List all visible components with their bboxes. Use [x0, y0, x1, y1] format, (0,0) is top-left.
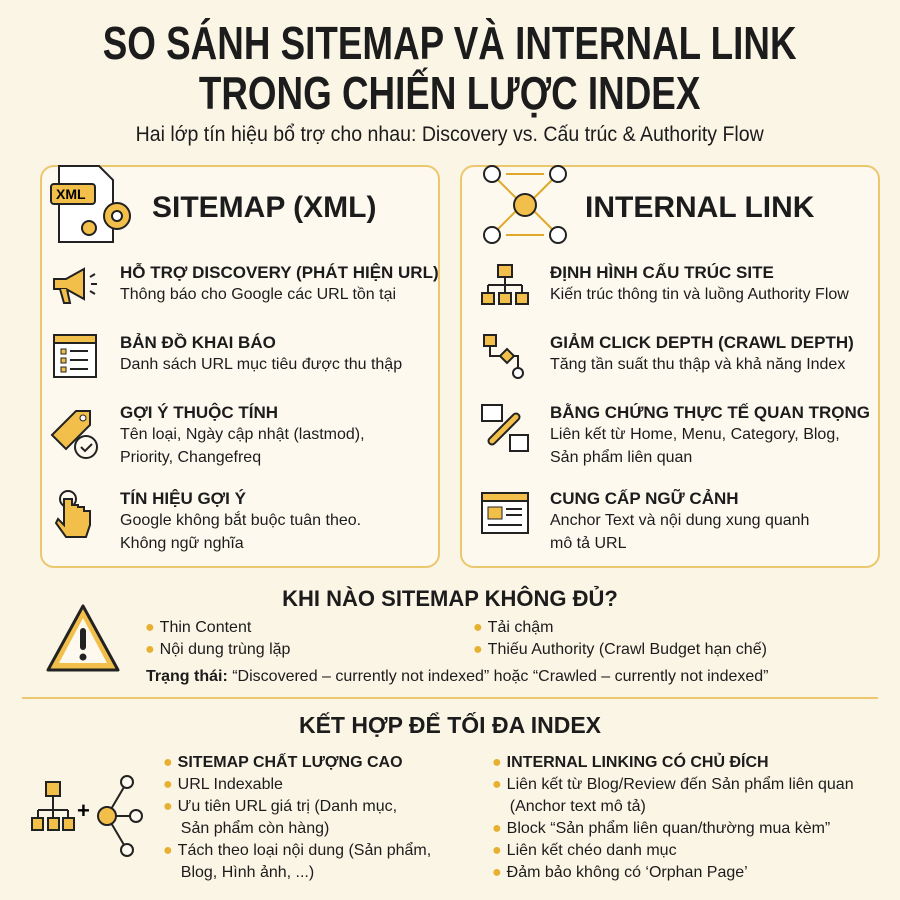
panel: internal link: BẰNG CHỨNG THỰC TẾ QUAN TRỌNG: [550, 403, 870, 422]
bullets: ● Thin Content: [145, 619, 251, 636]
icon: combine: +: [77, 798, 90, 823]
list: internal linking: ● INTERNAL LINKING CÓ CHỦ ĐÍCH: [492, 754, 769, 771]
list: internal linking: [492, 752, 854, 881]
panel: sitemap: Thông báo cho Google các URL tồn tại: [120, 286, 396, 303]
title: SO SÁNH SITEMAP VÀ INTERNAL LINK: [103, 17, 797, 69]
heading: KHI NÀO SITEMAP KHÔNG ĐỦ?: [282, 586, 618, 611]
panel: sitemap: Priority, Changefreq: [120, 449, 261, 466]
panel: sitemap: Tên loại, Ngày cập nhật (lastmod),: [120, 426, 365, 443]
panel: internal link: Anchor Text và nội dung xung quanh: [550, 512, 809, 529]
title: TRONG CHIẾN LƯỢC INDEX: [199, 67, 701, 119]
list: internal linking: ● Liên kết từ Blog/Review đến Sản phẩm liên quan: [492, 776, 854, 793]
list: internal linking: (Anchor text mô tả): [510, 798, 646, 815]
panel: internal link: Liên kết từ Home, Menu, Category, Blog,: [550, 426, 840, 443]
list: internal linking: ● Block “Sản phẩm liên quan/thường mua kèm”: [492, 820, 830, 837]
heading: SITEMAP (XML): [152, 191, 376, 224]
item: ban do: [53, 333, 402, 378]
list: sitemap chat luong cao: ● URL Indexable: [163, 776, 283, 793]
heading: KẾT HỢP ĐỂ TỐI ĐA INDEX: [299, 712, 601, 738]
panel: sitemap: TÍN HIỆU GỢI Ý: [120, 489, 246, 508]
panel: internal link: CUNG CẤP NGỮ CẢNH: [550, 489, 739, 508]
list: sitemap chat luong cao: Blog, Hình ảnh, ...): [181, 864, 314, 881]
list: sitemap chat luong cao: ● Tách theo loại nội dung (Sản phẩm,: [163, 842, 431, 859]
panel: sitemap: Google không bắt buộc tuân theo.: [120, 512, 361, 529]
item: cau truc: [481, 263, 849, 305]
panel: internal link: Tăng tần suất thu thập và khả năng Index: [550, 356, 845, 373]
list: sitemap chat luong cao: ● SITEMAP CHẤT LƯỢNG CAO: [163, 754, 403, 771]
panel: internal link: [460, 165, 880, 568]
section: khi nao sitemap khong du: ● Thiếu Authority (Crawl Budget hạn chế): [473, 641, 767, 658]
panel: sitemap: Không ngữ nghĩa: [120, 535, 244, 552]
panel: sitemap: HỖ TRỢ DISCOVERY (PHÁT HIỆN URL): [120, 263, 439, 282]
section: khi nao sitemap khong du: [46, 586, 768, 685]
item: bang chung: [481, 403, 870, 466]
item: tin hieu goi y: [54, 489, 361, 552]
item: discovery: [53, 263, 439, 304]
list: internal linking: ● Liên kết chéo danh mục: [492, 842, 677, 859]
list: sitemap chat luong cao: [163, 753, 431, 881]
section: khi nao sitemap khong du: ● Tải chậm: [473, 619, 553, 636]
panel: internal link: mô tả URL: [550, 535, 626, 552]
bullets: ● Nội dung trùng lặp: [145, 641, 290, 658]
list: sitemap chat luong cao: Sản phẩm còn hàng): [181, 820, 329, 837]
item: goi y thuoc tinh: [50, 402, 365, 466]
title: [103, 17, 797, 119]
item: click depth: [483, 333, 854, 379]
list: internal linking: ● Đảm bảo không có ‘Orphan Page’: [492, 864, 748, 881]
panel: sitemap: BẢN ĐỒ KHAI BÁO: [120, 333, 276, 352]
panel: sitemap: [40, 165, 440, 568]
panel: sitemap: Danh sách URL mục tiêu được thu thập: [120, 356, 402, 373]
icon: warning: [46, 604, 120, 672]
section: ket hop: [31, 712, 854, 881]
list: sitemap chat luong cao: ● Ưu tiên URL giá trị (Danh mục,: [163, 798, 397, 815]
icon: combine: [31, 775, 143, 857]
panel: internal link: GIẢM CLICK DEPTH (CRAWL DEPTH): [550, 333, 854, 352]
panel: internal link: Kiến trúc thông tin và luồng Authority Flow: [550, 286, 849, 303]
status: Trạng thái: “Discovered – currently not indexed” hoặc “Crawled – currently not indexed”: [146, 668, 768, 685]
panel: sitemap: GỢI Ý THUỘC TÍNH: [120, 403, 278, 422]
bullets: [145, 619, 290, 658]
subtitle: Hai lớp tín hiệu bổ trợ cho nhau: Discovery vs. Cấu trúc & Authority Flow: [136, 123, 764, 146]
panel: internal link: ĐỊNH HÌNH CẤU TRÚC SITE: [550, 263, 774, 282]
icon: xml file: XML: [56, 186, 86, 202]
item: ngu canh: [481, 489, 809, 552]
heading: INTERNAL LINK: [585, 191, 814, 224]
panel: internal link: Sản phẩm liên quan: [550, 449, 692, 466]
icon: xml file: [50, 165, 131, 243]
icon: network: [483, 165, 567, 244]
